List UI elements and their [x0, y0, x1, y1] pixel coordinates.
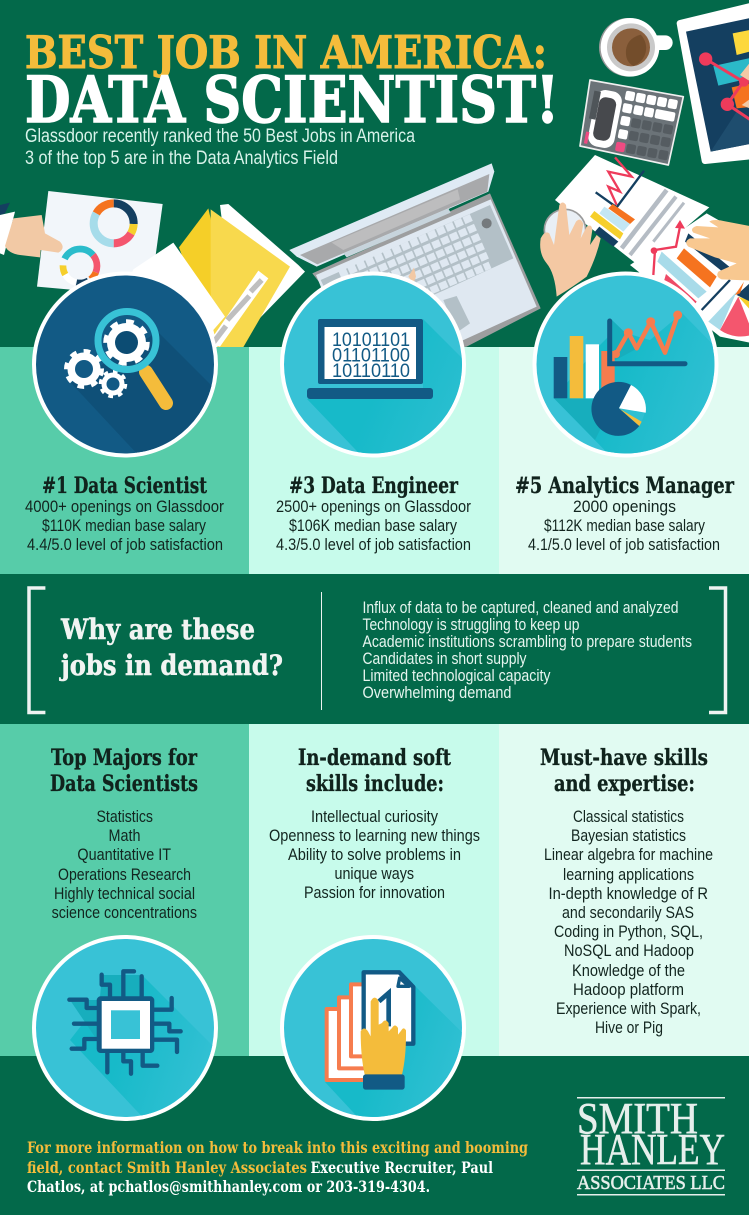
- subtitle: 3 of the top 5 are in the Data Analytics Field: [25, 148, 338, 169]
- heading: why are these jobs in demand: Why are these: [60, 613, 255, 646]
- illustration: coffee cup, calculator, tablet and reports: [540, 4, 749, 343]
- text block: demand reasons: Candidates in short supply: [362, 650, 527, 668]
- footer background: [0, 1056, 749, 1215]
- icon: laptop with binary code: 10101101: [332, 330, 410, 351]
- panel text: soft skills: In-demand soft: [298, 745, 452, 771]
- tablet: [680, 4, 749, 161]
- logo: Smith Hanley Associates LLC: SMITH: [577, 1094, 698, 1143]
- subtitle: [25, 126, 415, 169]
- text block: demand reasons: Influx of data to be captured, cleaned and analyzed: [362, 599, 678, 617]
- panel text: #1 Data Scientist: $110K median base salary: [42, 517, 207, 535]
- illustration: yellow folder with papers: [100, 204, 305, 350]
- call to action text: Chatlos, at pchatlos@smithhanley.com or 203-319-4304.: [27, 1177, 430, 1196]
- panel text: soft skills: Openness to learning new things: [269, 827, 480, 845]
- icon: hand on stacked documents: [280, 935, 480, 1125]
- panel text: must-have skills: Bayesian statistics: [571, 827, 686, 845]
- mouse and hand: [540, 202, 601, 297]
- panel text: top majors: Statistics: [96, 808, 153, 826]
- panel text: top majors: Math: [108, 827, 140, 845]
- calculator: [580, 80, 683, 165]
- title: BEST JOB IN AMERICA:: [25, 26, 547, 79]
- icon: bar, line and pie charts: [532, 272, 718, 458]
- icon: laptop with binary code: 01101100: [332, 346, 410, 366]
- panel text: top majors: Data Scientists: [50, 771, 198, 797]
- divider: [320, 592, 322, 710]
- panel text: top majors: [50, 745, 198, 922]
- panel text: #5 Analytics Manager: 2000 openings: [573, 498, 676, 516]
- panel text: must-have skills: NoSQL and Hadoop: [564, 942, 694, 960]
- panel text: top majors: Operations Research: [58, 866, 191, 884]
- heading: why are these jobs in demand: jobs in demand?: [58, 649, 283, 682]
- panel text: soft skills: Ability to solve problems in: [288, 846, 461, 864]
- panel text: must-have skills: and expertise:: [554, 771, 695, 797]
- panel text: must-have skills: learning applications: [563, 866, 694, 884]
- panel text: top majors: Highly technical social: [54, 885, 195, 903]
- icon: microchip: [32, 935, 225, 1125]
- panel text: must-have skills: and secondarily SAS: [562, 904, 694, 922]
- panel text: #3 Data Engineer: 4.3/5.0 level of job satisfaction: [276, 536, 471, 554]
- panel text: #5 Analytics Manager: $112K median base salary: [544, 517, 706, 535]
- illustration: hand holding paper with donut charts: [0, 191, 163, 297]
- heading: why are these jobs in demand: [58, 613, 283, 682]
- text block: demand reasons: Technology is struggling to keep up: [362, 616, 580, 634]
- text block: demand reasons: Limited technological capacity: [362, 667, 551, 685]
- panel text: top majors: Quantitative IT: [77, 846, 171, 864]
- text block: demand reasons: Academic institutions scrambling to prepare students: [362, 633, 692, 651]
- left bracket: [29, 588, 45, 712]
- panel text: soft skills: Intellectual curiosity: [311, 808, 439, 826]
- panel text: must-have skills: [540, 745, 713, 1037]
- icon: magnifier and gears: [32, 272, 218, 458]
- panel text: must-have skills: In-depth knowledge of R: [548, 885, 708, 903]
- panel text: must-have skills: Experience with Spark,: [556, 1000, 701, 1018]
- panel text: #3 Data Engineer: [276, 473, 471, 554]
- panel text: #3 Data Engineer: #3 Data Engineer: [289, 473, 458, 499]
- logo: Smith Hanley Associates LLC: [577, 1094, 725, 1196]
- panel text: must-have skills: Classical statistics: [573, 808, 684, 826]
- call to action text: field, contact Smith Hanley Associates: [27, 1158, 307, 1177]
- panel text: soft skills: unique ways: [334, 865, 414, 883]
- report pages: [555, 155, 749, 343]
- panel text: #1 Data Scientist: [25, 473, 224, 554]
- illustration: open laptop: [289, 163, 541, 360]
- panel: row 2 column backgrounds: [0, 724, 749, 1056]
- panel text: must-have skills: Must-have skills: [540, 745, 708, 771]
- panel text: soft skills: skills include:: [306, 771, 444, 797]
- panel text: soft skills: Passion for innovation: [304, 884, 445, 902]
- text block: demand reasons: Overwhelming demand: [362, 684, 512, 702]
- icon: laptop with binary code: 10110110: [332, 361, 410, 382]
- panel text: must-have skills: Hive or Pig: [595, 1019, 663, 1037]
- panel text: #1 Data Scientist: #1 Data Scientist: [42, 473, 208, 499]
- panel text: top majors: Top Majors for: [51, 745, 197, 771]
- panel text: #5 Analytics Manager: 4.1/5.0 level of job satisfaction: [528, 536, 720, 554]
- icon: laptop with binary code: [280, 272, 466, 458]
- coffee cup: [599, 18, 665, 77]
- panel text: must-have skills: Hadoop platform: [573, 981, 684, 999]
- call to action text: [27, 1138, 528, 1196]
- panel text: must-have skills: Coding in Python, SQL,: [554, 923, 703, 941]
- call to action text: Executive Recruiter, Paul: [310, 1158, 493, 1177]
- right bracket: [709, 588, 726, 712]
- panel text: #1 Data Scientist: 4.4/5.0 level of job satisfaction: [27, 536, 223, 554]
- panel text: #3 Data Engineer: 2500+ openings on Glassdoor: [276, 498, 471, 516]
- panel text: soft skills: [269, 745, 480, 902]
- panel: row 1 column backgrounds: [0, 347, 749, 574]
- panel text: must-have skills: Linear algebra for machine: [544, 846, 713, 864]
- text block: demand reasons: [362, 599, 692, 702]
- right hand: [686, 220, 749, 281]
- call to action text: For more information on how to break into this exciting and booming: [27, 1138, 528, 1157]
- panel text: top majors: science concentrations: [52, 904, 197, 922]
- panel text: #3 Data Engineer: $106K median base salary: [289, 517, 458, 535]
- title: [25, 26, 559, 138]
- subtitle: Glassdoor recently ranked the 50 Best Jobs in America: [25, 126, 415, 147]
- logo: Smith Hanley Associates LLC: ASSOCIATES LLC: [577, 1172, 725, 1194]
- panel text: #1 Data Scientist: 4000+ openings on Glassdoor: [25, 498, 224, 516]
- title: DATA SCIENTIST!: [25, 63, 559, 138]
- panel text: must-have skills: Knowledge of the: [572, 962, 685, 980]
- panel text: #5 Analytics Manager: [515, 473, 734, 554]
